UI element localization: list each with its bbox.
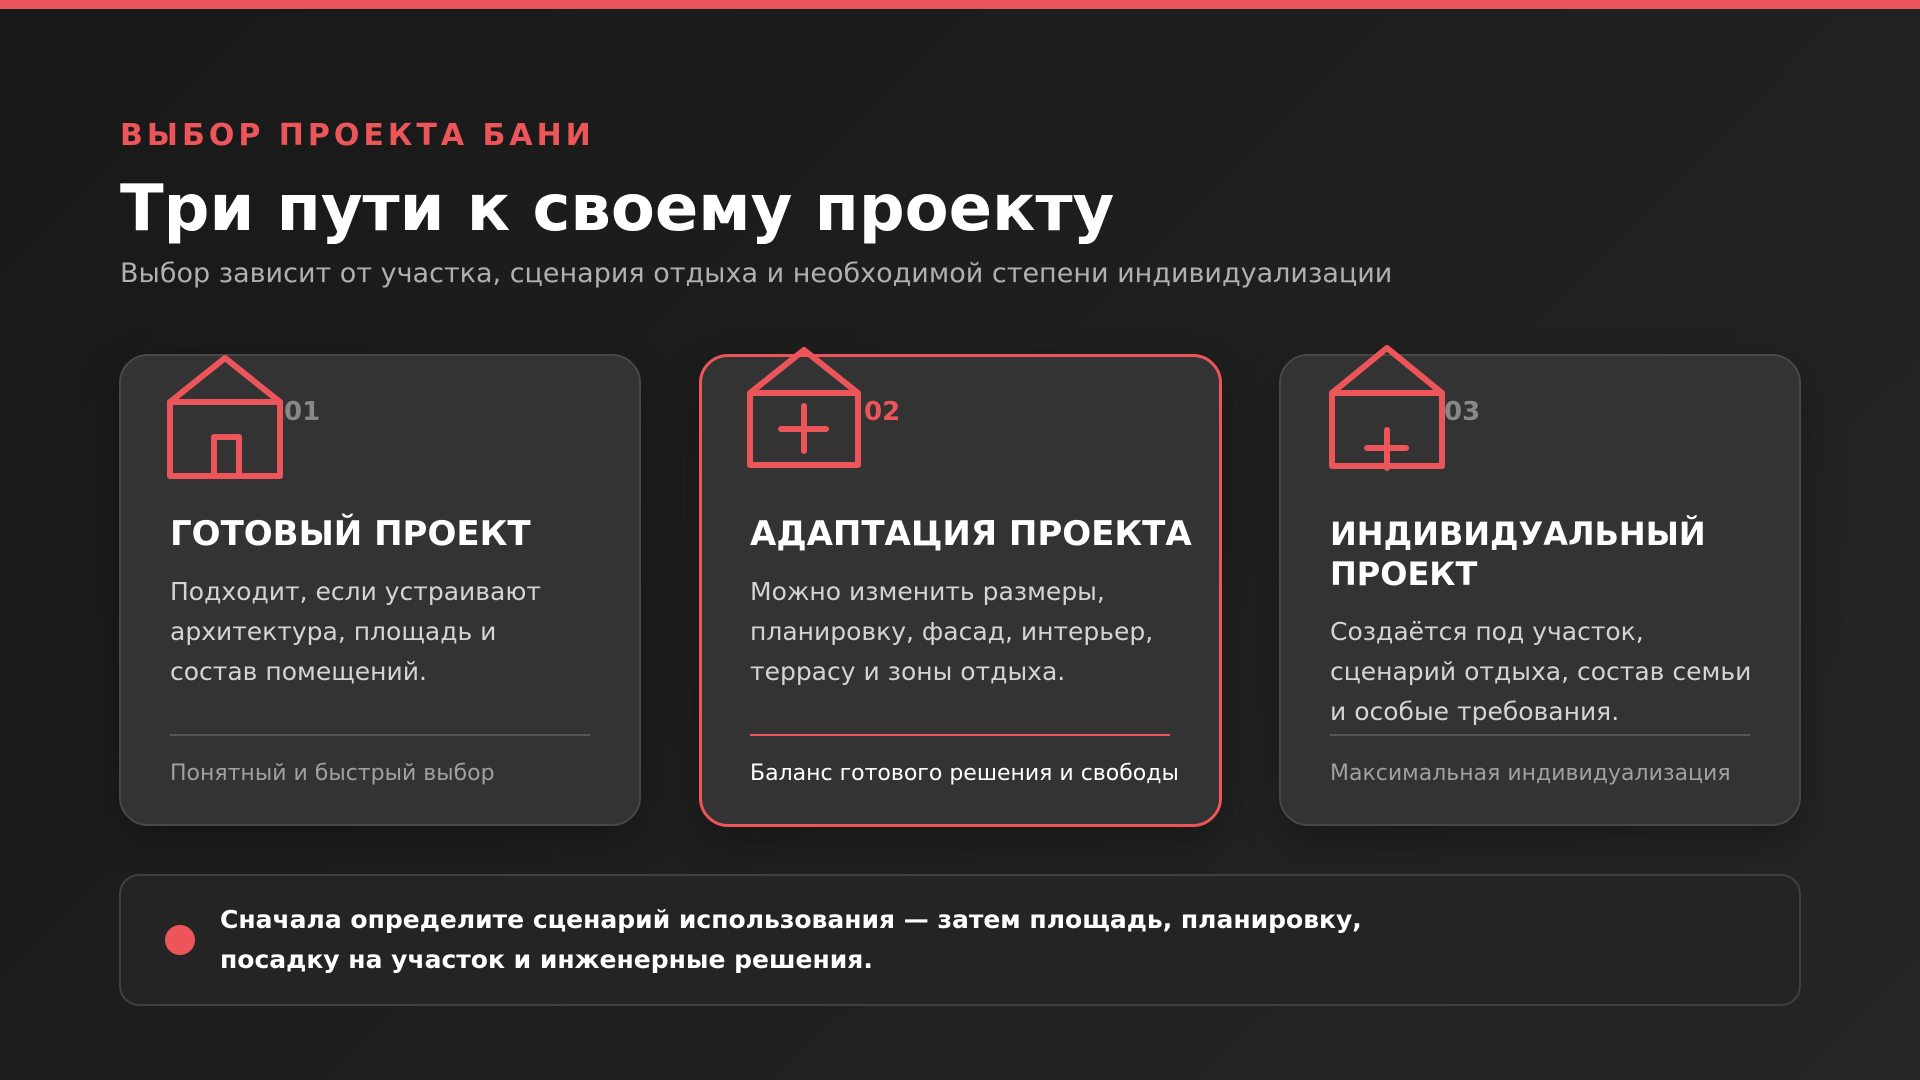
description: архитектура, площадь и — [170, 617, 496, 646]
callout text: Сначала определите сценарий использования — затем площадь, планировку, — [220, 905, 1362, 934]
icon: red dot — [165, 925, 195, 955]
callout — [119, 874, 1801, 1006]
benefit: Понятный и быстрый выбор — [170, 761, 495, 786]
description: террасу и зоны отдыха. — [750, 657, 1065, 686]
description: Подходит, если устраивают — [170, 577, 541, 606]
heading: individual: ПРОЕКТ — [1330, 555, 1477, 593]
divider — [1330, 734, 1750, 736]
divider — [170, 734, 590, 736]
card background 2 — [698, 354, 1222, 826]
heading: individual: ИНДИВИДУАЛЬНЫЙ — [1330, 515, 1706, 553]
callout text: посадку на участок и инженерные решения. — [220, 945, 873, 974]
subtitle: Выбор зависит от участка, сценария отдыха и необходимой степени индивидуализации — [120, 258, 1392, 289]
description — [170, 577, 541, 686]
description: и особые требования. — [1330, 697, 1619, 726]
card background 3 — [1279, 354, 1801, 826]
eyebrow label: ВЫБОР ПРОЕКТА БАНИ — [120, 118, 595, 153]
callout text — [220, 905, 1362, 974]
title: Три пути к своему проекту — [120, 172, 1114, 246]
benefit: Баланс готового решения и свободы — [750, 761, 1179, 786]
number 03: 03 — [1444, 397, 1480, 427]
description: планировку, фасад, интерьер, — [750, 617, 1153, 646]
description: состав помещений. — [170, 657, 427, 686]
heading: individual — [1330, 515, 1706, 593]
benefit: Максимальная индивидуализация — [1330, 761, 1731, 786]
heading: ready project: ГОТОВЫЙ ПРОЕКТ — [170, 514, 531, 554]
heading: adaptation: АДАПТАЦИЯ ПРОЕКТА — [750, 514, 1192, 554]
description: Можно изменить размеры, — [750, 577, 1105, 606]
description — [1330, 617, 1751, 726]
card background 1 — [119, 354, 641, 826]
number 02: 02 — [864, 397, 900, 427]
description — [750, 577, 1153, 686]
description: сценарий отдыха, состав семьи — [1330, 657, 1751, 686]
divider — [750, 734, 1170, 736]
top accent bar — [0, 0, 1920, 9]
number 01: 01 — [284, 397, 320, 427]
description: Создаётся под участок, — [1330, 617, 1644, 646]
